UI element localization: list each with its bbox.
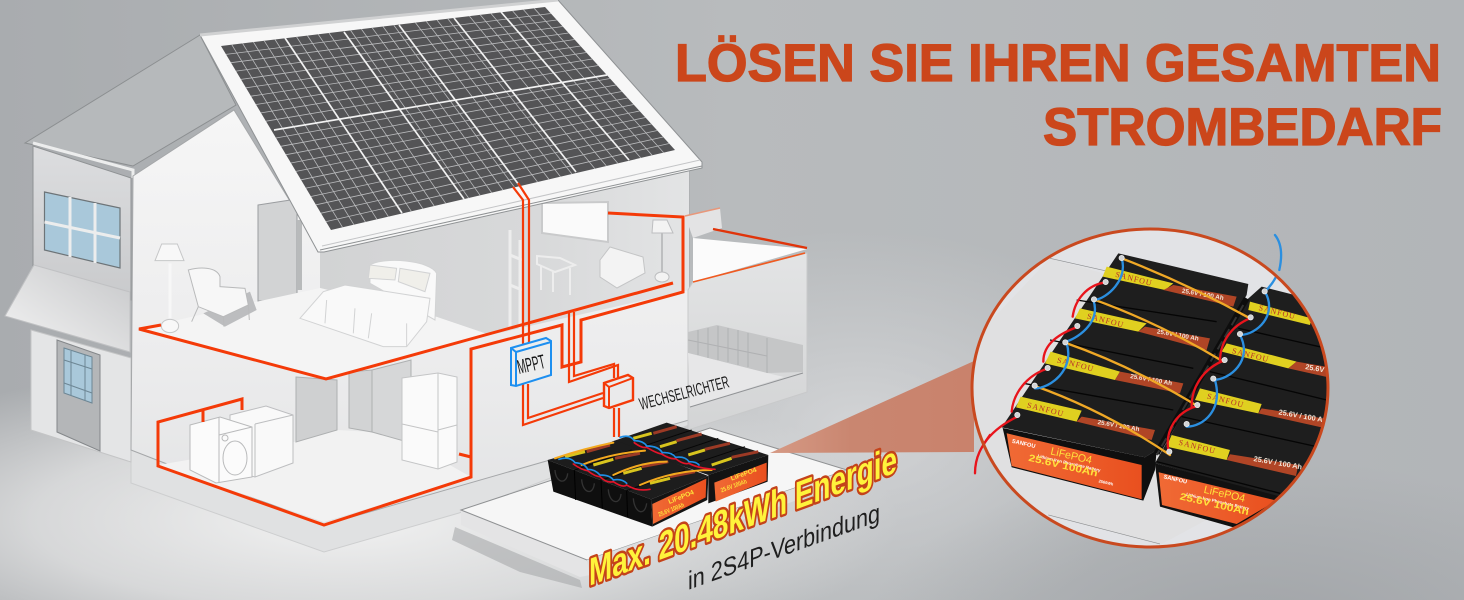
battery label: LiFePO4	[730, 467, 758, 483]
balcony	[685, 208, 807, 430]
icon: washing machine	[190, 417, 252, 483]
window	[44, 192, 120, 268]
left battery strips: 25.6V / 100 Ah	[1097, 419, 1140, 433]
house illustration	[5, 0, 807, 552]
zoom circle	[960, 229, 1343, 547]
door	[57, 340, 100, 451]
red wiring	[139, 183, 683, 525]
battery platform	[452, 428, 847, 588]
building base slab	[131, 400, 689, 552]
MPPT box	[511, 338, 551, 386]
right battery	[1155, 287, 1343, 528]
icon: bed	[300, 260, 437, 347]
left battery strips	[1016, 267, 1237, 440]
left battery strips: 25.6V / 100 Ah	[1156, 328, 1199, 343]
left battery strips: SANFOU	[1086, 312, 1125, 329]
rear battery row	[612, 423, 768, 503]
enlarged batteries	[984, 253, 1326, 544]
left battery strips: 25.6V / 100 Ah	[1181, 288, 1224, 302]
terminals	[1015, 255, 1267, 454]
battery label: LiFePO4	[667, 489, 695, 506]
front battery row	[548, 441, 708, 527]
left battery labels: 2560Wh	[1098, 478, 1114, 487]
lower room	[158, 360, 471, 522]
beam to zoom circle	[770, 361, 974, 453]
solar panel array	[221, 7, 675, 230]
left battery labels: Lithium Iron Phosphate Battery	[1037, 453, 1102, 473]
solar roof	[200, 0, 702, 252]
inverter label: WECHSELRICHTER	[637, 372, 731, 414]
left battery labels	[1011, 439, 1114, 487]
side roof	[25, 35, 236, 166]
right battery labels: SANFOU	[1163, 474, 1187, 486]
left battery strips: SANFOU	[1115, 270, 1154, 288]
title	[675, 34, 1442, 157]
icon: right floor lamp	[652, 220, 673, 282]
right battery strips: SANFOU	[1258, 303, 1297, 321]
left battery labels: LiFePO4	[1049, 446, 1093, 467]
icon: lounge chair	[600, 247, 645, 288]
title: STROMBEDARF	[1043, 98, 1442, 157]
energy headline: Max. 20.48kWh Energie	[589, 437, 897, 595]
right battery labels: LiFePO4	[1203, 484, 1246, 505]
left battery strips: 25.6V / 100 Ah	[1130, 373, 1173, 387]
icon: floor lamp	[155, 244, 184, 333]
connecting cables	[984, 258, 1276, 456]
right battery strips: 25.6V / 100 Ah	[1253, 454, 1303, 472]
right battery strips: SANFOU	[1231, 346, 1270, 364]
left battery strips: SANFOU	[1056, 356, 1095, 373]
upper room	[139, 165, 689, 379]
circle outline	[972, 229, 1328, 547]
left battery labels: 25.6V 100Ah	[1027, 453, 1099, 479]
icon: fridge	[402, 373, 457, 469]
left wing	[5, 146, 131, 462]
connection note: in 2S4P-Verbindung	[688, 498, 880, 596]
right battery labels	[1163, 474, 1250, 518]
MPPT box: MPPT	[515, 351, 547, 379]
battery capacity: 25.6V 100Ah	[720, 478, 748, 494]
battery capacity: 25.6V 100Ah	[657, 502, 685, 519]
right battery strips	[1167, 302, 1330, 476]
right battery labels: 25.6V 100Ah	[1179, 492, 1250, 518]
battery cables	[555, 436, 715, 490]
icon: table and shelf	[510, 230, 575, 330]
icon: television	[542, 202, 608, 242]
left battery strips: SANFOU	[1026, 401, 1065, 418]
left battery labels: SANFOU	[1011, 439, 1036, 450]
icon: dryer	[230, 406, 293, 477]
right battery strips: SANFOU	[1206, 392, 1245, 409]
small battery bank	[548, 423, 768, 527]
overhanging cable ends	[975, 235, 1281, 473]
circle backdrop	[972, 229, 1328, 547]
right battery strips: SANFOU	[1178, 438, 1217, 456]
left battery	[1002, 253, 1248, 501]
right battery strips: 25.6V / 100 Ah	[1278, 407, 1328, 425]
platform surface	[960, 258, 1330, 545]
right battery labels: Lithium Iron Phosphate Battery	[1186, 492, 1250, 511]
inverter box	[604, 375, 633, 408]
main walls	[131, 110, 689, 525]
title: LÖSEN SIE IHREN GESAMTEN	[675, 34, 1441, 93]
icon: armchair	[188, 268, 257, 327]
right battery strips: 25.6V	[1305, 362, 1325, 374]
